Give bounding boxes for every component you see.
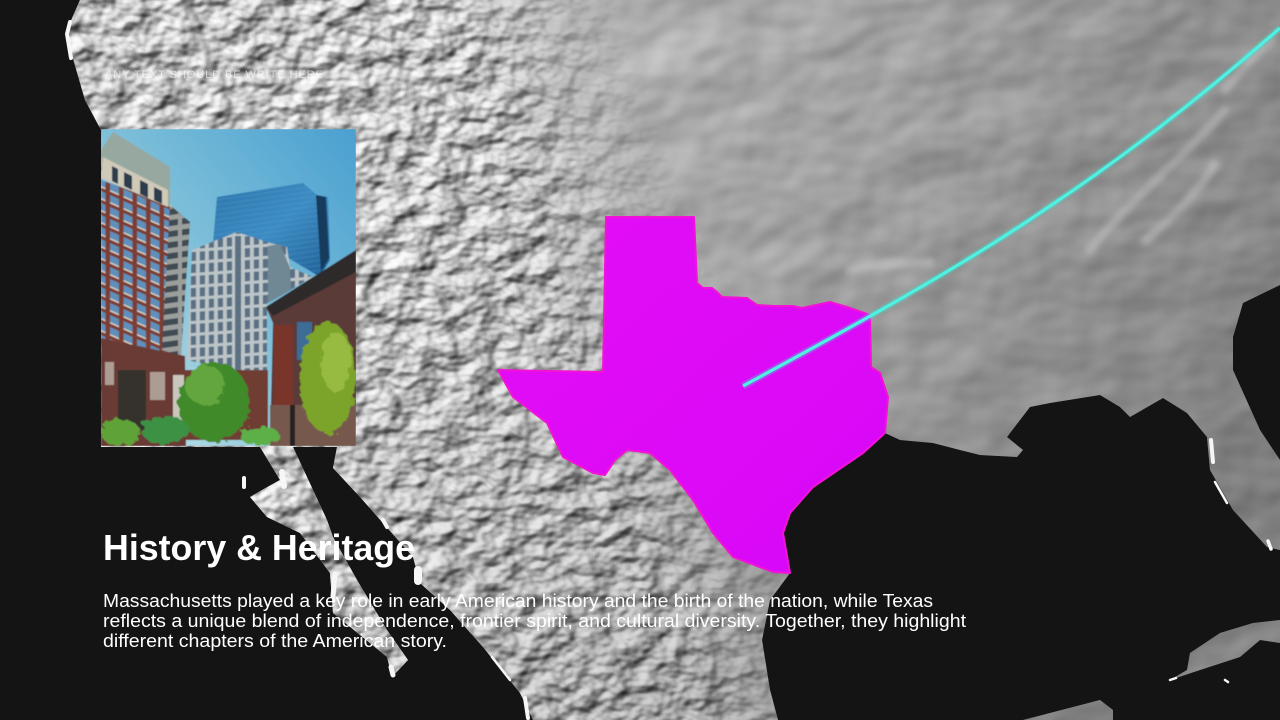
sky — [101, 129, 356, 446]
heading: History & Heritage — [103, 527, 415, 568]
brick tower — [101, 132, 190, 446]
highlighted state: Texas — [498, 217, 888, 573]
blue glass tower — [213, 183, 330, 277]
placeholder caption: ANY TEXT SHOULD BE WRITE HERE — [105, 69, 323, 81]
trees — [100, 322, 356, 445]
body paragraph: Massachusetts played a key role in early American history and the birth of the nation, while Texas — [103, 591, 933, 611]
route line from Texas to Massachusetts — [743, 28, 1280, 386]
lamp post — [290, 405, 295, 446]
low brick building and column — [173, 370, 268, 440]
body paragraph — [103, 591, 966, 651]
body paragraph: different chapters of the American story. — [103, 631, 447, 651]
brownstone hall — [266, 250, 356, 446]
photo contents — [100, 129, 356, 446]
body paragraph: reflects a unique blend of independence, frontier spirit, and cultural diversity. Together, they highlight — [103, 611, 966, 631]
photo: Boston skyline — [101, 129, 356, 446]
grey office building — [187, 232, 313, 372]
